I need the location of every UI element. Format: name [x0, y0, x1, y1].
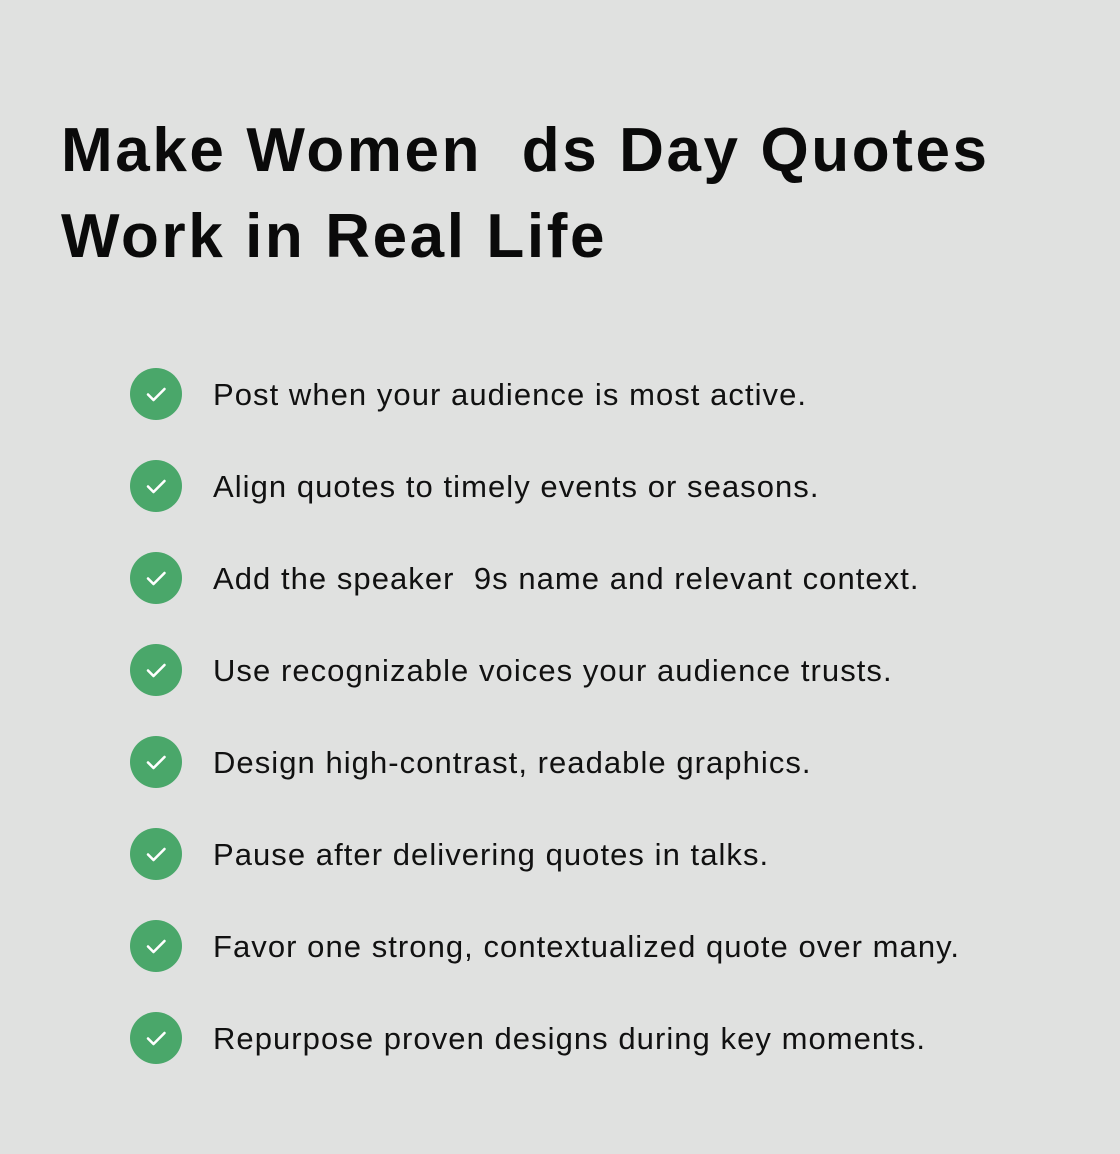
item 3: Add the speaker 9s name and relevant context.: [213, 561, 920, 596]
item 6: Pause after delivering quotes in talks.: [213, 837, 769, 872]
title: [61, 116, 990, 271]
title: Work in Real Life: [61, 202, 607, 271]
title: Make Women ds Day Quotes: [61, 116, 990, 185]
item 4: [130, 644, 893, 696]
item 4: Use recognizable voices your audience trusts.: [213, 653, 893, 688]
item 5: Design high-contrast, readable graphics.: [213, 745, 812, 780]
item 8: Repurpose proven designs during key moments.: [213, 1021, 926, 1056]
item 1: [130, 368, 807, 420]
item 6: [130, 828, 769, 880]
item 5: [130, 736, 812, 788]
item 3: [130, 552, 920, 604]
item 2: [130, 460, 820, 512]
item 7: Favor one strong, contextualized quote over many.: [213, 929, 960, 964]
checklist: [130, 368, 960, 1064]
item 1: Post when your audience is most active.: [213, 377, 807, 412]
item 7: [130, 920, 960, 972]
item 8: [130, 1012, 926, 1064]
item 2: Align quotes to timely events or seasons.: [213, 469, 820, 504]
